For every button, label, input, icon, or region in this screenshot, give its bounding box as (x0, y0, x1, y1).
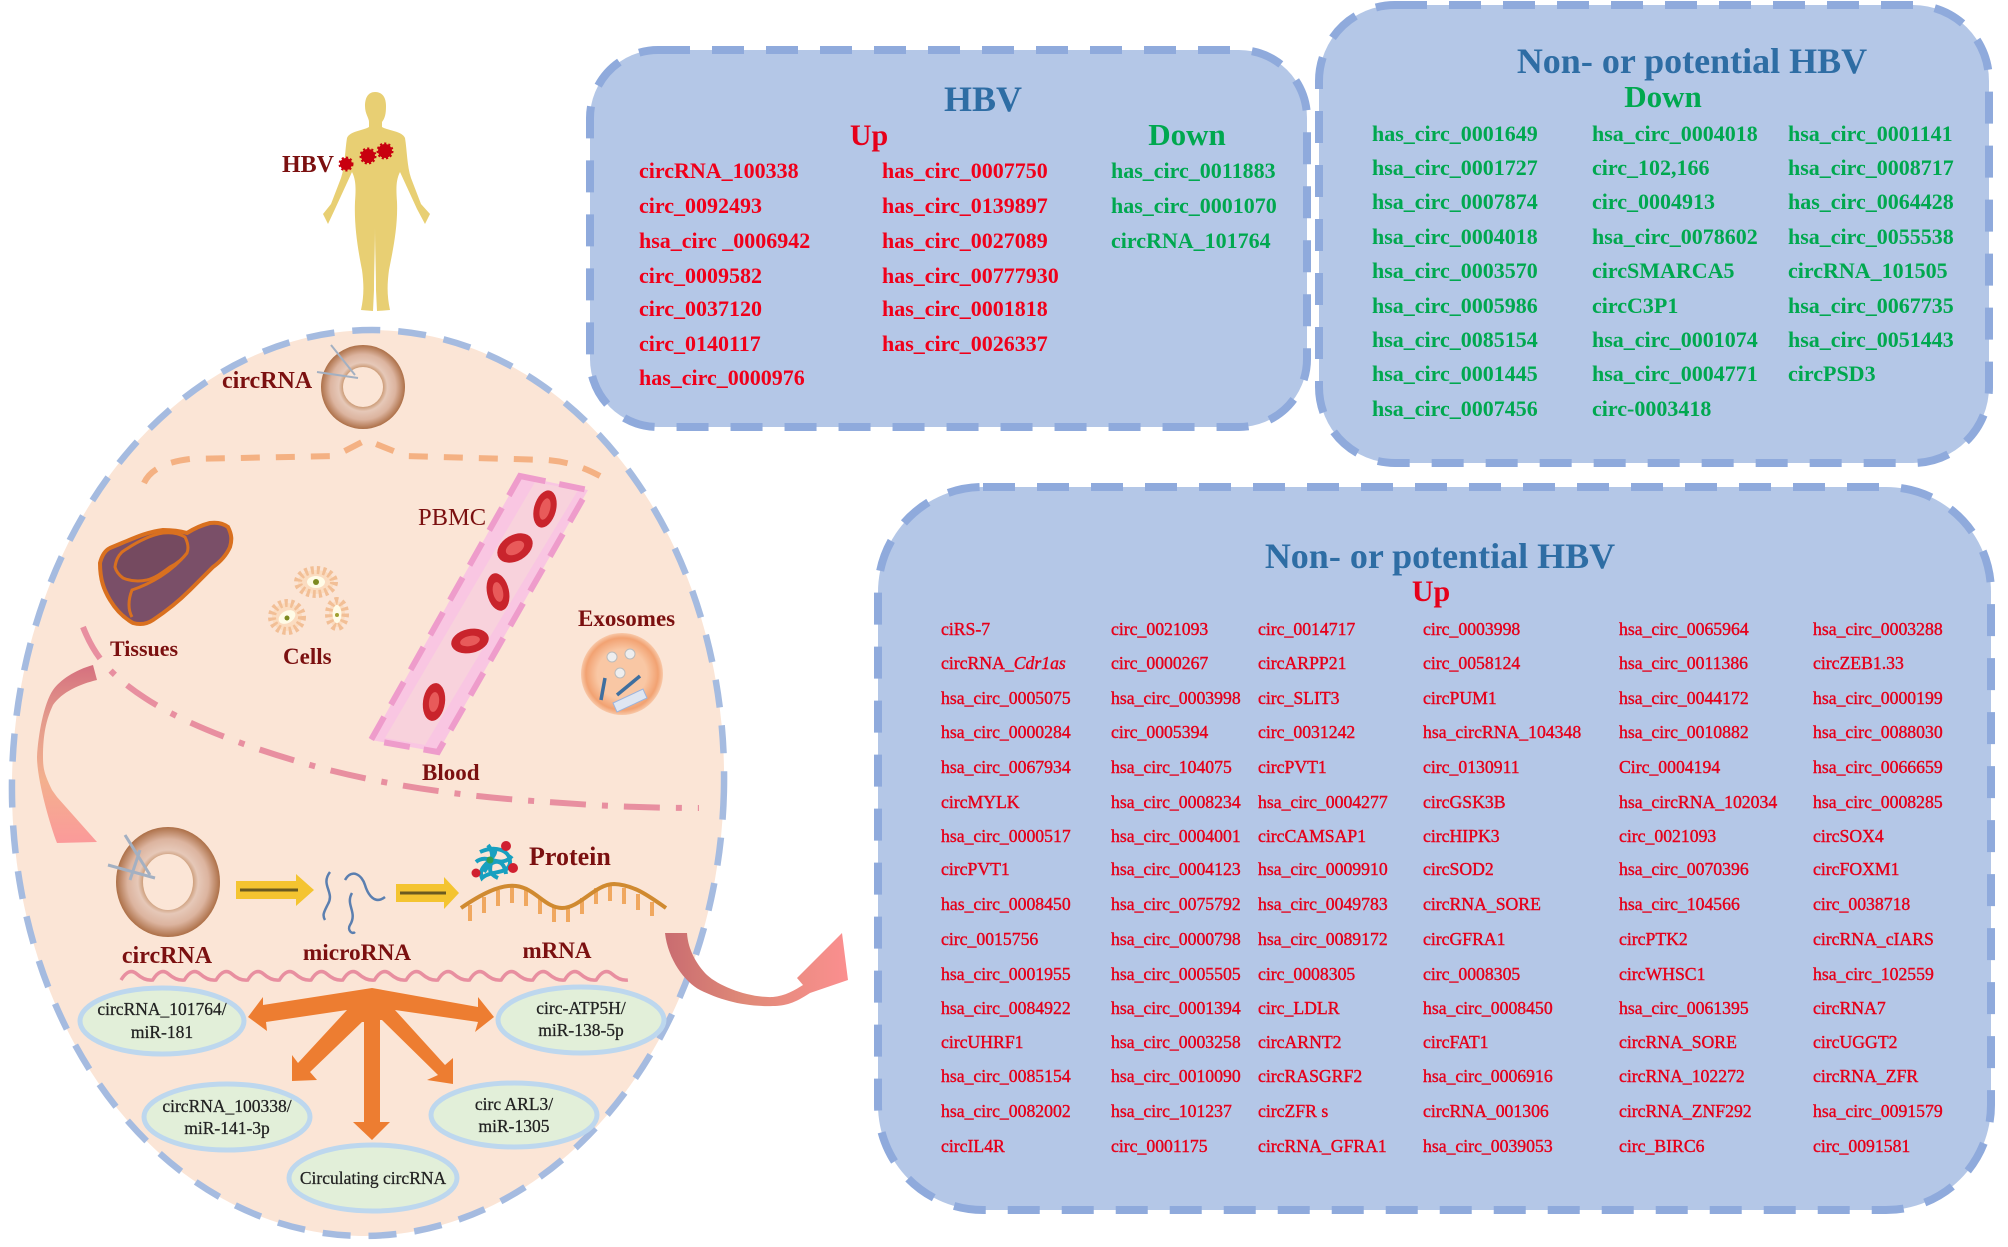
list: up column 4: circGFRA1 (1423, 929, 1506, 949)
icon: mRNA strand (461, 884, 666, 922)
list: up column 3: circ_0031242 (1258, 722, 1355, 742)
list: down column 3: hsa_circ_0001141 (1788, 121, 1953, 146)
list: down column 2: circ_102,166 (1592, 155, 1710, 180)
list: up column 5: hsa_circ_0011386 (1619, 653, 1748, 673)
list: up column 5: circRNA_SORE (1619, 1032, 1737, 1052)
list: down column 2: circ_0004913 (1592, 189, 1715, 214)
list: up column 6: circSOX4 (1813, 826, 1884, 846)
list: up column 1: circ_0037120 (639, 296, 762, 321)
list: up column 1: circ_0092493 (639, 193, 762, 218)
node: circRNA_101764/miR-181: circRNA_101764/ (97, 999, 227, 1019)
list: up column 3: circ_0014717 (1258, 619, 1355, 639)
label: circRNA: circRNA (122, 943, 213, 969)
list: up column 1: circMYLK (941, 792, 1020, 812)
list: up column 3: hsa_circ_0004277 (1258, 792, 1388, 812)
list: up column 2: hsa_circ_0003258 (1111, 1032, 1241, 1052)
list: up column 4: circRNA_SORE (1423, 894, 1541, 914)
list: up column 6: circRNA_cIARS (1813, 929, 1934, 949)
list: up column 6: hsa_circ_0000199 (1813, 688, 1943, 708)
node: Circulating circRNA (289, 1145, 457, 1211)
list: down column 2: hsa_circ_0004018 (1592, 121, 1758, 146)
list: down column 2: circ-0003418 (1592, 396, 1711, 421)
list: up column 3: circARPP21 (1258, 653, 1346, 673)
arrow: circRNA to microRNA (236, 874, 314, 906)
list: up column 2: circ_0021093 (1111, 619, 1208, 639)
list: up column 4: circFAT1 (1423, 1032, 1488, 1052)
list: down column 1: hsa_circ_0007874 (1372, 189, 1538, 214)
list: up column 4: circ_0058124 (1423, 653, 1520, 673)
node: circRNA_101764/miR-181: miR-181 (131, 1022, 193, 1042)
icon: protein (472, 841, 518, 878)
list: up column 2: hsa_circ_0004123 (1111, 859, 1241, 879)
icon: human body with HBV (282, 92, 430, 311)
list: down column 1: hsa_circ_0004018 (1372, 224, 1538, 249)
list: down column 1: hsa_circ_0085154 (1372, 327, 1538, 352)
list: up column 2: hsa_circ_0010090 (1111, 1066, 1241, 1086)
list: up column 1: hsa_circ_0000517 (941, 826, 1071, 846)
list: up column 3: circRASGRF2 (1258, 1066, 1362, 1086)
list: up column 5: hsa_circ_0010882 (1619, 722, 1749, 742)
list: up column 1: circ_0015756 (941, 929, 1038, 949)
node: circRNA_100338/miR-141-3p: circRNA_100338/ (162, 1096, 292, 1116)
list: up column 1: hsa_circ_0084922 (941, 998, 1071, 1018)
list: up column 2: hsa_circ_0005505 (1111, 964, 1241, 984)
list: up column 4: hsa_circ_0006916 (1423, 1066, 1553, 1086)
list: up column 5: hsa_circ_0061395 (1619, 998, 1749, 1018)
list: up column 2: hsa_circ_0003998 (1111, 688, 1241, 708)
label: Blood: Blood (422, 760, 480, 785)
label: circRNA top: circRNA (222, 368, 313, 394)
list: up column 2: circ_0005394 (1111, 722, 1208, 742)
node: circRNA_101764/miR-181 (80, 988, 244, 1054)
list: up column 2: has_circ_0027089 (882, 228, 1048, 253)
list: up column 2: circ_0000267 (1111, 653, 1208, 673)
list: up column 3: circPVT1 (1258, 757, 1327, 777)
icon: circRNA ring top (317, 345, 405, 429)
list: up column 1: has_circ_0008450 (941, 894, 1071, 914)
list: up column 2: hsa_circ_0004001 (1111, 826, 1241, 846)
icon: blood vessel (371, 476, 588, 752)
list: down column 2: hsa_circ_0078602 (1592, 224, 1758, 249)
label: Protein: Protein (529, 842, 611, 871)
arrow: to non-HBV up panel (665, 933, 848, 1006)
list: up column 4: circ_0008305 (1423, 964, 1520, 984)
arrow: microRNA to mRNA (396, 877, 459, 909)
heading: Non- or potential HBV: Non- or potential HBV (1517, 41, 1867, 81)
icon: microRNA (324, 872, 385, 933)
list: up column 2: has_circ_0001818 (882, 296, 1048, 321)
list: up column 1: hsa_circ_0082002 (941, 1101, 1071, 1121)
list: down column 2: circSMARCA5 (1592, 258, 1735, 283)
list: up column 5: circPTK2 (1619, 929, 1688, 949)
list: down column 1: hsa_circ_0001445 (1372, 361, 1538, 386)
list: up column 3: circ_0008305 (1258, 964, 1355, 984)
list: up column 4: circSOD2 (1423, 859, 1494, 879)
list: up column 6: hsa_circ_0003288 (1813, 619, 1943, 639)
icon: circRNA ring large (108, 827, 220, 937)
list: up column 4: circHIPK3 (1423, 826, 1500, 846)
list: up column 1: hsa_circ_0000284 (941, 722, 1071, 742)
list: up column 2: has_circ_0139897 (882, 193, 1048, 218)
list: up column 1: circUHRF1 (941, 1032, 1024, 1052)
panel: Non- or potential HBV up (878, 487, 1991, 1210)
list: up column 4: hsa_circ_0039053 (1423, 1136, 1553, 1156)
label: Tissues: Tissues (110, 636, 179, 661)
list: up column 3: hsa_circ_0009910 (1258, 859, 1388, 879)
list: up column 2: hsa_circ_104075 (1111, 757, 1232, 777)
list: up column 5: hsa_circ_0044172 (1619, 688, 1749, 708)
list: up column 1: circIL4R (941, 1136, 1005, 1156)
list: up column 6: circZEB1.33 (1813, 653, 1904, 673)
list: up column 6: hsa_circ_0066659 (1813, 757, 1943, 777)
list: down column 2: hsa_circ_0004771 (1592, 361, 1758, 386)
red blood cells (420, 488, 561, 722)
node: circ ARL3/miR-1305 (431, 1083, 597, 1147)
list: up column 2: hsa_circ_0001394 (1111, 998, 1241, 1018)
list: up column 4: circ_0003998 (1423, 619, 1520, 639)
node: circRNA_100338/miR-141-3p: miR-141-3p (184, 1118, 270, 1138)
panel: circRNA oval (1, 321, 735, 1245)
list: down column 3: circPSD3 (1788, 361, 1876, 386)
list: down column 3: has_circ_0064428 (1788, 189, 1954, 214)
list: up column 1: has_circ_0000976 (639, 365, 805, 390)
heading: Non- or potential HBV: Non- or potential HBV (1265, 536, 1615, 576)
heading: Up: Up (1412, 575, 1450, 608)
list: down column 3: hsa_circ_0055538 (1788, 224, 1954, 249)
list: up column 1: hsa_circ _0006942 (639, 228, 810, 253)
list: up column 3: hsa_circ_0049783 (1258, 894, 1388, 914)
list: up column 3: circARNT2 (1258, 1032, 1342, 1052)
list: up column 4: circRNA_001306 (1423, 1101, 1549, 1121)
list: up column 2: hsa_circ_0008234 (1111, 792, 1241, 812)
list: down column 1: hsa_circ_0001727 (1372, 155, 1538, 180)
list: up column 1: hsa_circ_0067934 (941, 757, 1071, 777)
label: mRNA: mRNA (522, 938, 592, 963)
list: down column 1: has_circ_0001649 (1372, 121, 1538, 146)
list: up column 1: hsa_circ_0005075 (941, 688, 1071, 708)
list: up column 4: hsa_circRNA_104348 (1423, 722, 1581, 742)
list: up column 2: circ_0001175 (1111, 1136, 1208, 1156)
list: down column 1: hsa_circ_0005986 (1372, 293, 1538, 318)
list: up column 2: has_circ_0007750 (882, 158, 1048, 183)
icon: cells (272, 570, 345, 631)
label: microRNA: microRNA (303, 940, 411, 966)
arrow: tissue to circRNA (37, 665, 97, 843)
list: up column 5: hsa_circ_104566 (1619, 894, 1740, 914)
icon: exosome (581, 633, 663, 715)
list: up column 3: hsa_circ_0089172 (1258, 929, 1388, 949)
list: up column 5: Circ_0004194 (1619, 757, 1720, 777)
list: down column: circRNA_101764 (1111, 228, 1271, 253)
list: down column 2: circC3P1 (1592, 293, 1678, 318)
list: up column 6: circRNA7 (1813, 998, 1886, 1018)
list: up column 6: circ_0038718 (1813, 894, 1910, 914)
virus particles (340, 144, 392, 170)
list: up column 6: hsa_circ_0088030 (1813, 722, 1943, 742)
list: up column 5: circWHSC1 (1619, 964, 1705, 984)
list: up column 6: hsa_circ_0091579 (1813, 1101, 1943, 1121)
list: up column 6: circ_0091581 (1813, 1136, 1910, 1156)
list: up column 1: circ_0140117 (639, 331, 761, 356)
list: up column 1: circPVT1 (941, 859, 1010, 879)
list: up column 3: circ_LDLR (1258, 998, 1340, 1018)
node: circ ARL3/miR-1305: miR-1305 (479, 1116, 550, 1136)
list: up column 5: circ_0021093 (1619, 826, 1716, 846)
list: down column: has_circ_0011883 (1111, 158, 1276, 183)
list: up column 2: has_circ_0026337 (882, 331, 1048, 356)
list: up column 4: hsa_circ_0008450 (1423, 998, 1553, 1018)
dash-dot divider (83, 627, 699, 808)
list: up column 6: hsa_circ_102559 (1813, 964, 1934, 984)
node: circ-ATP5H/miR-138-5p (498, 987, 664, 1053)
list: up column 5: hsa_circ_0070396 (1619, 859, 1749, 879)
list: down column 3: hsa_circ_0067735 (1788, 293, 1954, 318)
list: up column 6: circUGGT2 (1813, 1032, 1897, 1052)
list: up column 6: hsa_circ_0008285 (1813, 792, 1943, 812)
list: up column 2: hsa_circ_0075792 (1111, 894, 1241, 914)
panel: HBV (590, 50, 1307, 427)
list: down column 3: circRNA_101505 (1788, 258, 1948, 283)
list: down column 1: hsa_circ_0003570 (1372, 258, 1538, 283)
list: up column 2: has_circ_00777930 (882, 263, 1059, 288)
list: up column 6: circRNA_ZFR (1813, 1066, 1918, 1086)
list: up column 1: ciRS-7 (941, 619, 990, 639)
list: up column 1: circRNA_Cdr1as (941, 653, 1066, 673)
node: circRNA_100338/miR-141-3p (144, 1084, 310, 1150)
label: Cells: Cells (283, 644, 332, 669)
node: Circulating circRNA: Circulating circRNA (300, 1168, 447, 1188)
list: up column 5: hsa_circRNA_102034 (1619, 792, 1777, 812)
node: circ-ATP5H/miR-138-5p: miR-138-5p (538, 1020, 624, 1040)
list: up column 4: circPUM1 (1423, 688, 1497, 708)
list: up column 3: circZFR s (1258, 1101, 1328, 1121)
list: up column 3: circRNA_GFRA1 (1258, 1136, 1387, 1156)
node: circ-ATP5H/miR-138-5p: circ-ATP5H/ (536, 998, 626, 1018)
list: up column 3: circ_SLIT3 (1258, 688, 1340, 708)
list: down column 1: hsa_circ_0007456 (1372, 396, 1538, 421)
list: up column 5: hsa_circ_0065964 (1619, 619, 1749, 639)
list: up column 1: circRNA_100338 (639, 158, 799, 183)
label: HBV: HBV (282, 152, 335, 178)
heading: Up: Up (850, 119, 888, 152)
node: circ ARL3/miR-1305: circ ARL3/ (475, 1094, 553, 1114)
list: down column 3: hsa_circ_0008717 (1788, 155, 1954, 180)
list: up column 1: hsa_circ_0001955 (941, 964, 1071, 984)
list: down column 3: hsa_circ_0051443 (1788, 327, 1954, 352)
wavy divider (121, 972, 628, 980)
list: up column 2: hsa_circ_0000798 (1111, 929, 1241, 949)
heading: Down: Down (1624, 79, 1702, 114)
list: up column 4: circGSK3B (1423, 792, 1506, 812)
list: up column 1: circ_0009582 (639, 263, 762, 288)
list: up column 5: circ_BIRC6 (1619, 1136, 1705, 1156)
list: up column 4: circ_0130911 (1423, 757, 1520, 777)
dashed bracket (144, 440, 600, 483)
list: up column 1: hsa_circ_0085154 (941, 1066, 1071, 1086)
icon: liver tissue (100, 523, 231, 624)
list: up column 5: circRNA_ZNF292 (1619, 1101, 1752, 1121)
list: up column 2: hsa_circ_101237 (1111, 1101, 1232, 1121)
heading: Down: Down (1148, 117, 1226, 152)
list: up column 3: circCAMSAP1 (1258, 826, 1366, 846)
list: up column 5: circRNA_102272 (1619, 1066, 1745, 1086)
label: PBMC: PBMC (418, 504, 486, 531)
panel: Non- or potential HBV down (1319, 5, 1989, 463)
list: up column 6: circFOXM1 (1813, 859, 1899, 879)
arrows: five orange branches (248, 988, 494, 1140)
label: Exosomes: Exosomes (578, 606, 675, 631)
list: down column: has_circ_0001070 (1111, 193, 1277, 218)
list: down column 2: hsa_circ_0001074 (1592, 327, 1758, 352)
heading: HBV: HBV (944, 79, 1022, 119)
